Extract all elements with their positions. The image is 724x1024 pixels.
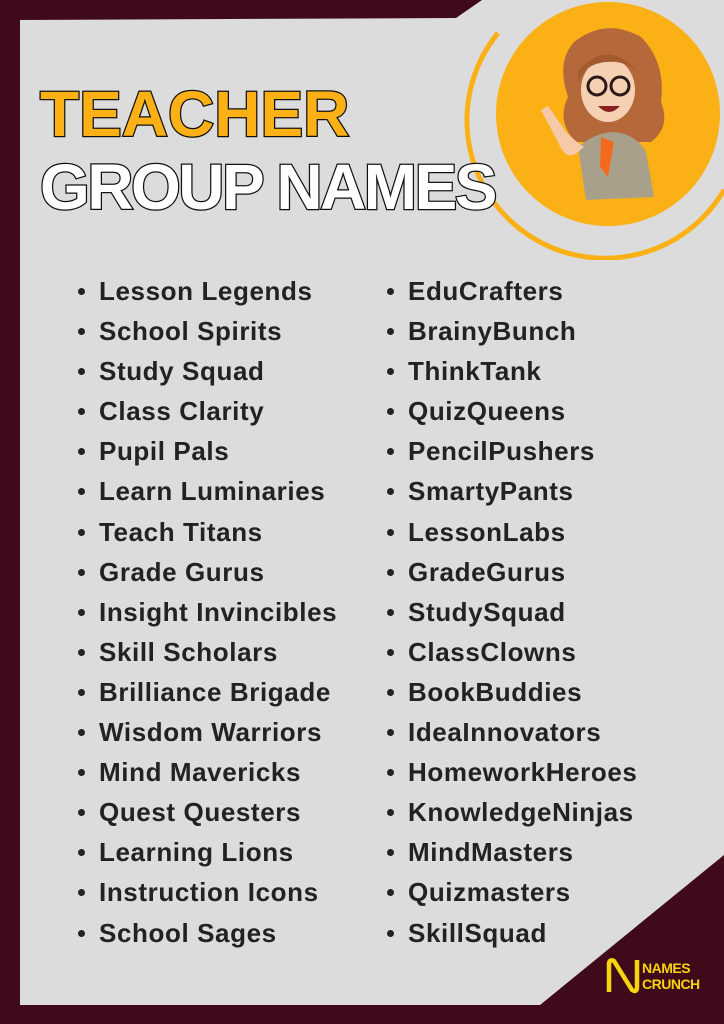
- list: left column: School Spirits: [99, 316, 282, 346]
- logo: Names Crunch: [606, 958, 700, 994]
- title: TEACHER: [40, 78, 349, 150]
- list: left column: [78, 276, 337, 948]
- list: right column: Quizmasters: [408, 877, 571, 907]
- list: left column: Insight Invincibles: [99, 597, 337, 627]
- list: left column: Class Clarity: [99, 396, 264, 426]
- list: right column: MindMasters: [408, 837, 574, 867]
- title: [39, 78, 496, 223]
- list: right column: KnowledgeNinjas: [408, 797, 634, 827]
- title: GROUP NAMES: [40, 151, 495, 223]
- list: left column: Grade Gurus: [99, 557, 265, 587]
- list: left column: Quest Questers: [99, 797, 301, 827]
- list: left column: Lesson Legends: [99, 276, 313, 306]
- list: right column: QuizQueens: [408, 396, 566, 426]
- list: right column: [387, 276, 637, 948]
- list: right column: BookBuddies: [408, 677, 582, 707]
- list: right column: ClassClowns: [408, 637, 576, 667]
- logo: Names Crunch: NAMES: [642, 960, 690, 976]
- list: right column: StudySquad: [408, 597, 566, 627]
- list: right column: HomeworkHeroes: [408, 757, 637, 787]
- list: right column: SkillSquad: [408, 918, 547, 948]
- logo: Names Crunch: CRUNCH: [642, 976, 700, 992]
- list: right column: EduCrafters: [408, 276, 563, 306]
- list: left column: Study Squad: [99, 356, 264, 386]
- list: left column: Brilliance Brigade: [99, 677, 331, 707]
- list: right column: PencilPushers: [408, 436, 595, 466]
- list: right column: LessonLabs: [408, 517, 566, 547]
- list: right column: ThinkTank: [408, 356, 541, 386]
- list: left column: Skill Scholars: [99, 637, 278, 667]
- decorative ring arc: [464, 31, 724, 260]
- list: left column: Pupil Pals: [99, 436, 229, 466]
- list: right column: IdeaInnovators: [408, 717, 601, 747]
- list: left column: Teach Titans: [99, 517, 263, 547]
- list: left column: Mind Mavericks: [99, 757, 301, 787]
- list: left column: Wisdom Warriors: [99, 717, 322, 747]
- list: left column: School Sages: [99, 918, 277, 948]
- list: left column: Learning Lions: [99, 837, 294, 867]
- list: right column: SmartyPants: [408, 476, 574, 506]
- list: right column: GradeGurus: [408, 557, 566, 587]
- illustration: teacher in yellow circle: [496, 2, 720, 226]
- list: left column: Learn Luminaries: [99, 476, 325, 506]
- list: left column: Instruction Icons: [99, 877, 319, 907]
- list: right column: BrainyBunch: [408, 316, 576, 346]
